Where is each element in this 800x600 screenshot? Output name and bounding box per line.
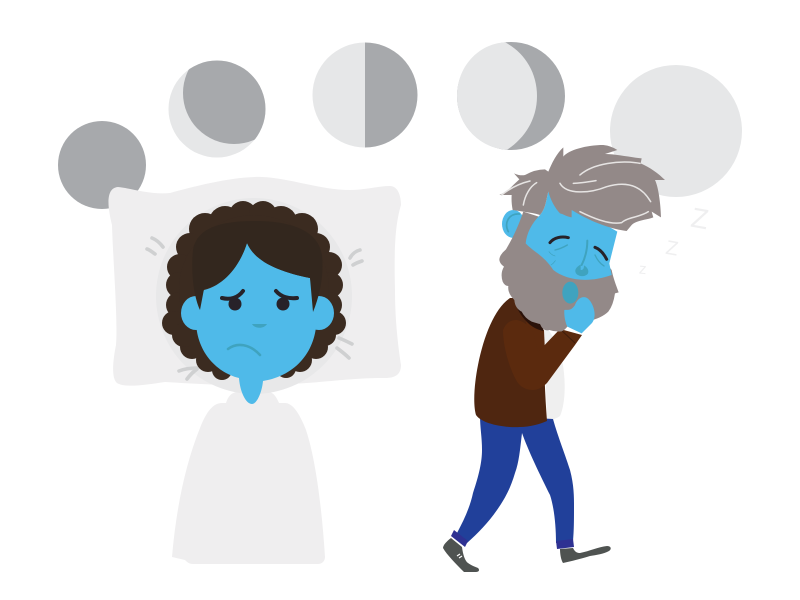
swept hair bbox=[499, 145, 665, 231]
face bbox=[526, 192, 617, 280]
beard and head, mapped from close-up bbox=[499, 145, 665, 333]
moon: new moon bbox=[58, 121, 146, 209]
jacket inner shade bbox=[525, 318, 545, 362]
nose bbox=[575, 241, 588, 276]
nose bbox=[252, 324, 267, 328]
ears bbox=[181, 296, 334, 330]
shoelaces bbox=[457, 549, 579, 558]
moon: gibbous phase bbox=[457, 42, 565, 150]
moon: full moon bbox=[610, 65, 742, 197]
trousers and walking legs bbox=[457, 415, 574, 543]
sleeping Z letters: Z bbox=[664, 237, 680, 261]
moon: waxing phase bbox=[168, 60, 266, 158]
body under blanket bbox=[172, 392, 325, 564]
face and neck bbox=[196, 243, 317, 404]
shirt bbox=[544, 322, 565, 421]
shoes bbox=[443, 538, 611, 572]
eyes bbox=[222, 291, 297, 310]
jacket arm bbox=[503, 320, 582, 390]
frown mouth bbox=[228, 345, 260, 355]
tired walking man bbox=[443, 145, 665, 572]
curly hair bbox=[162, 201, 346, 380]
hand bbox=[564, 297, 595, 333]
toss and turn marks bbox=[147, 238, 362, 379]
sleeping Z letters: z bbox=[638, 261, 647, 278]
cuff line bbox=[560, 329, 575, 343]
pillow bbox=[108, 177, 401, 386]
brown jacket bbox=[474, 298, 547, 427]
beard bbox=[499, 212, 619, 331]
trouser cuffs bbox=[451, 530, 574, 549]
jacket collar shadow bbox=[513, 297, 544, 331]
head shadow on pillow bbox=[156, 198, 352, 394]
ear bbox=[502, 210, 525, 238]
sleeping Z letters: Z bbox=[689, 202, 711, 235]
woman in bed bbox=[108, 177, 401, 564]
hair fringe bbox=[192, 221, 323, 312]
hair highlights bbox=[502, 162, 651, 223]
moon: half moon bbox=[312, 42, 418, 148]
sleeping Z letters bbox=[638, 202, 711, 278]
closed eyes bbox=[549, 237, 607, 266]
throat bbox=[562, 282, 578, 304]
